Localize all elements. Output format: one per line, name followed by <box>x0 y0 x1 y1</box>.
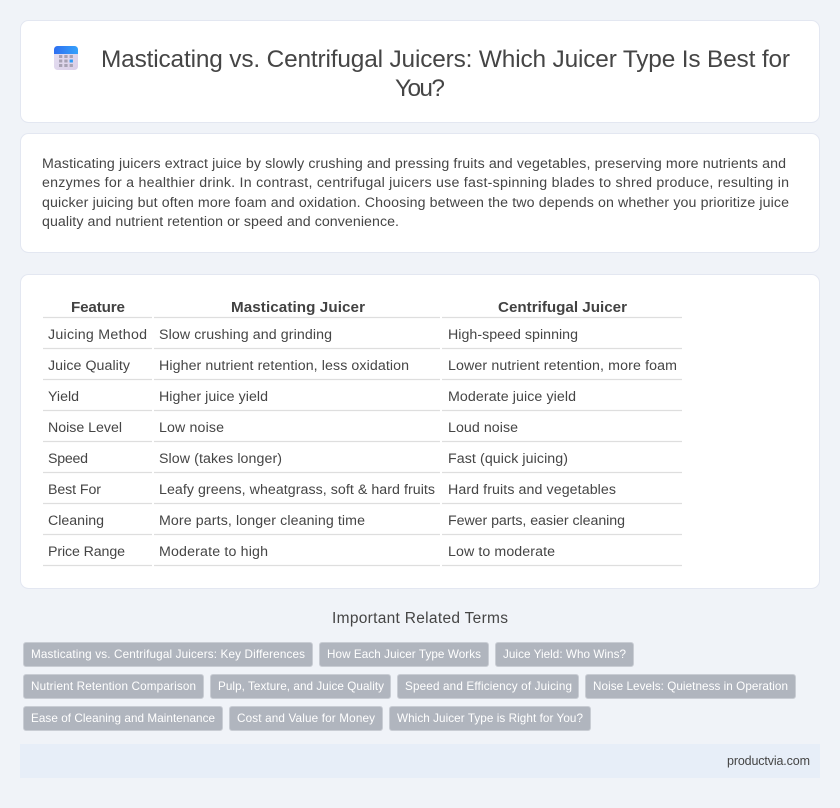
related term chips: Juice Yield: Who Wins? <box>503 648 626 661</box>
text block: introduction <box>42 156 789 230</box>
row: yield: Yield <box>48 389 79 405</box>
row: yield <box>48 389 576 405</box>
row: best for: Leafy greens, wheatgrass, soft & hard fruits <box>159 482 435 498</box>
related term chips: Ease of Cleaning and Maintenance <box>31 712 215 725</box>
related term chips: Noise Levels: Quietness in Operation <box>593 680 788 693</box>
row: yield: Higher juice yield <box>159 389 268 405</box>
table header: Masticating Juicer <box>231 299 365 316</box>
related term chips: How Each Juicer Type Works <box>327 648 481 661</box>
panel: introduction <box>20 134 820 252</box>
related term chips: Cost and Value for Money <box>237 712 375 725</box>
related term chips: Masticating vs. Centrifugal Juicers: Key Differences <box>31 648 305 661</box>
row: cleaning: More parts, longer cleaning time <box>159 513 365 529</box>
row: juicing method <box>48 327 578 343</box>
row: speed: Speed <box>48 451 88 467</box>
row: juicing method: Juicing Method <box>48 327 147 343</box>
panel: header <box>20 20 820 122</box>
heading: related terms: Important Related Terms <box>332 610 508 627</box>
icon: calendar <box>54 46 78 70</box>
footer <box>20 744 820 778</box>
row: price range: Price Range <box>48 544 125 560</box>
text block: introduction: quality and nutrient retention or speed and convenience. <box>42 214 399 230</box>
row: noise level <box>48 420 518 436</box>
text block: introduction: quicker juicing but often more foam and oxidation. Choosing between the two depends on whether you prioritize juice <box>42 195 789 211</box>
related term chips: Nutrient Retention Comparison <box>31 680 196 693</box>
table header: Feature <box>71 299 125 316</box>
row: best for: Best For <box>48 482 101 498</box>
related term chips: Pulp, Texture, and Juice Quality <box>218 680 384 693</box>
row: yield: Moderate juice yield <box>448 389 576 405</box>
row: juicing method: High-speed spinning <box>448 327 578 343</box>
related term chips: Which Juicer Type is Right for You? <box>397 712 583 725</box>
footer: productvia.com <box>727 754 810 768</box>
related term chips <box>24 642 796 730</box>
row: price range: Low to moderate <box>448 544 555 560</box>
row: noise level: Low noise <box>159 420 224 436</box>
row: cleaning: Cleaning <box>48 513 104 529</box>
row: speed: Slow (takes longer) <box>159 451 282 467</box>
row: speed: Fast (quick juicing) <box>448 451 568 467</box>
row: juice quality: Lower nutrient retention, more foam <box>448 358 677 374</box>
row: juice quality <box>48 358 677 374</box>
row: best for <box>48 482 616 498</box>
title: You? <box>395 75 445 102</box>
row: noise level: Loud noise <box>448 420 518 436</box>
text block: introduction: Masticating juicers extract juice by slowly crushing and pressing fruits and vegetables, preserving more nutrients and <box>42 156 786 172</box>
row: cleaning: Fewer parts, easier cleaning <box>448 513 625 529</box>
title: Masticating vs. Centrifugal Juicers: Which Juicer Type Is Best for <box>101 46 790 73</box>
table header <box>71 299 627 316</box>
row: speed <box>48 451 568 467</box>
row: noise level: Noise Level <box>48 420 122 436</box>
table header: Centrifugal Juicer <box>498 299 627 316</box>
text block: introduction: enzymes for a healthier drink. In contrast, centrifugal juicers use fast-spinning blades to shred produce, resulting in <box>42 175 789 191</box>
title <box>101 46 790 102</box>
row: price range: Moderate to high <box>159 544 268 560</box>
row: best for: Hard fruits and vegetables <box>448 482 616 498</box>
related term chips: Speed and Efficiency of Juicing <box>405 680 572 693</box>
panel: comparison table <box>20 274 820 588</box>
row: juice quality: Higher nutrient retention, less oxidation <box>159 358 409 374</box>
row: juice quality: Juice Quality <box>48 358 131 374</box>
row: price range <box>48 544 555 560</box>
row: juicing method: Slow crushing and grinding <box>159 327 332 343</box>
row: cleaning <box>48 513 625 529</box>
